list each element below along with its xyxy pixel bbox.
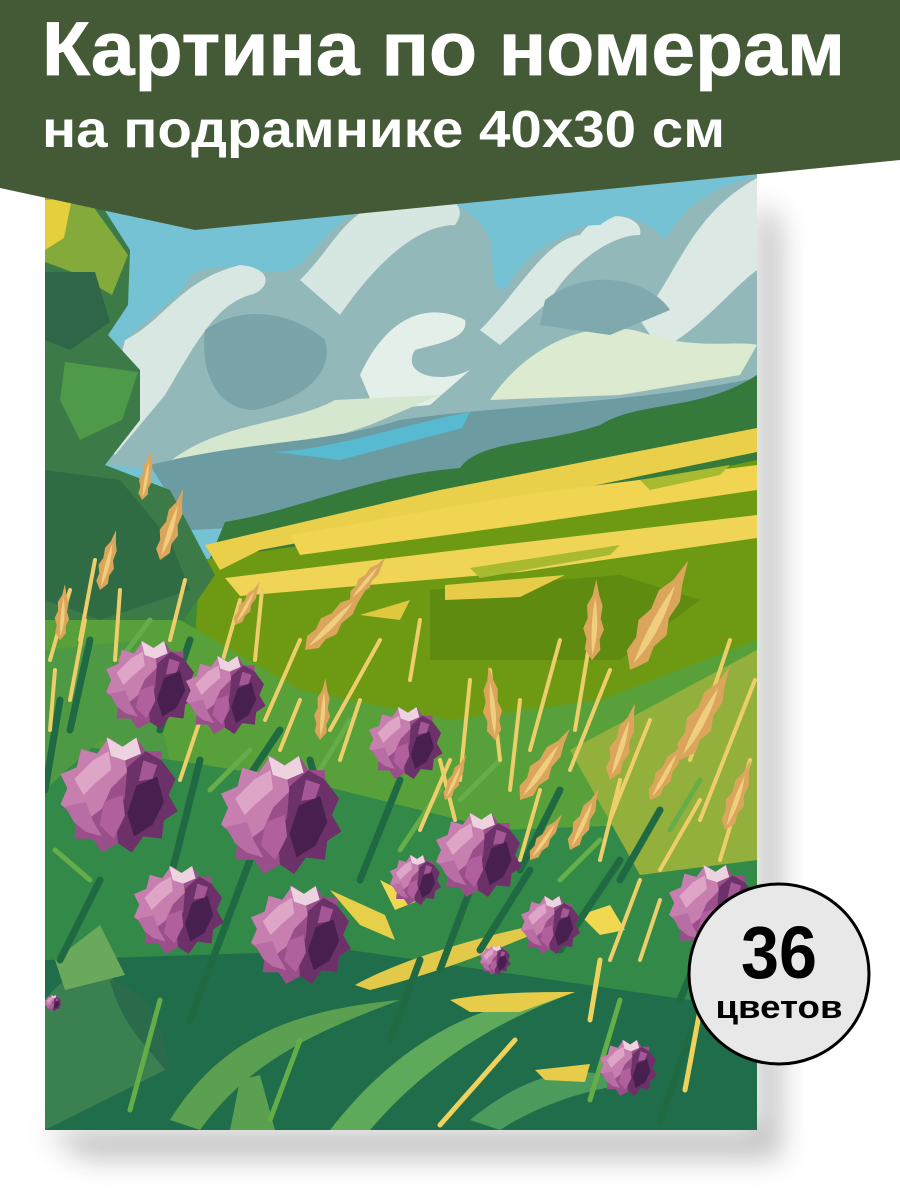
clouds	[100, 176, 757, 480]
meadow base	[182, 600, 198, 630]
treeline	[205, 375, 757, 570]
badge: 36 colours	[689, 884, 869, 1064]
canvas drop shadow	[45, 200, 780, 1158]
wide foreground leaves	[55, 880, 625, 1130]
title: Картина по номерам	[42, 7, 845, 92]
green field	[196, 460, 757, 720]
golden field streaks	[205, 428, 757, 620]
distant hills	[150, 378, 757, 530]
clover flowers	[45, 641, 757, 1096]
grass blades	[45, 560, 755, 1125]
sky	[105, 174, 757, 559]
badge: 36 colours: 36	[741, 911, 817, 994]
header banner	[0, 0, 900, 230]
painting	[45, 170, 759, 1140]
foreground meadow	[45, 620, 757, 830]
wheat ears	[53, 450, 759, 864]
left tree	[45, 195, 215, 660]
subtitle: на подрамнике 40х30 см	[42, 101, 725, 159]
badge: 36 colours: цветов	[716, 989, 842, 1025]
